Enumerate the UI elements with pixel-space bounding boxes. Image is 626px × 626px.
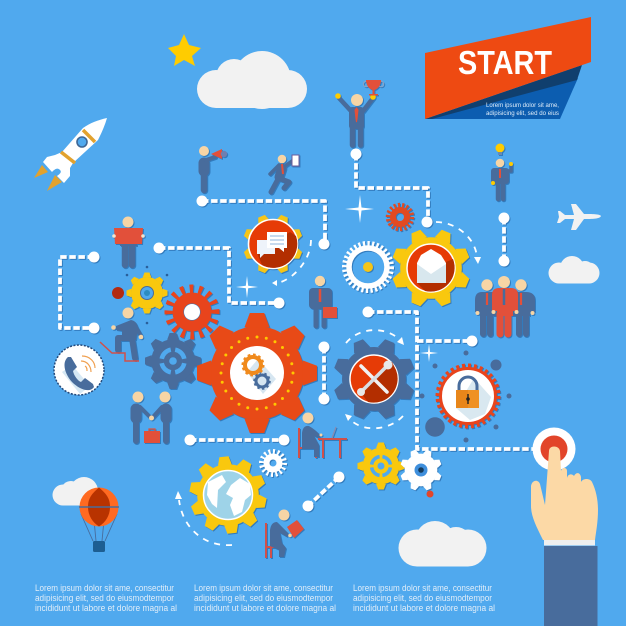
heading: start: START [458, 44, 552, 81]
decorative dots around padlock [420, 350, 512, 442]
gear: big red central [197, 313, 317, 433]
figure: man climbing stairs [111, 308, 143, 358]
icon: airplane [557, 204, 601, 230]
gear: yellow spoked [358, 442, 404, 490]
figure: man at desk [299, 412, 347, 458]
icon: small right cloud [548, 256, 600, 284]
text block: column 2 [194, 583, 336, 613]
sparkles [236, 195, 438, 362]
gear: small yellow [126, 272, 168, 314]
gear: globe [182, 449, 274, 541]
text block: column 1 [35, 583, 177, 613]
text block: column 3: incididunt ut labore et dolore magna al [353, 603, 495, 613]
text block: column 1: Lorem ipsum dolor sit ame, consectitur [35, 583, 174, 593]
gear: white ring gear [344, 244, 392, 290]
decorative red dot [426, 490, 434, 498]
gear: chat bubbles [234, 205, 312, 283]
icon: hand pressing button [531, 446, 598, 626]
arrows: dashed arcs [175, 222, 481, 545]
icon: rocket [34, 118, 107, 191]
figure: man reading book [112, 216, 145, 265]
text block: column 3 [353, 583, 495, 613]
icon: star [168, 34, 201, 66]
figures: handshake with briefcase [132, 392, 170, 443]
text block: column 2: incididunt ut labore et dolore magna al [194, 603, 336, 613]
figure: running man with clipboard [270, 155, 299, 192]
icon: bottom cloud [398, 521, 486, 566]
gear: dark blue spoked [145, 333, 201, 389]
gear: tools [320, 325, 428, 433]
arrow: red stairs [100, 342, 139, 361]
text block: column 3: Lorem ipsum dolor sit ame, consectitur [353, 583, 492, 593]
decorative dots near small yellow gear [112, 266, 168, 324]
gear: red sun [169, 289, 215, 335]
gear: small red [388, 206, 412, 228]
figure: man with megaphone [199, 146, 227, 190]
text block: column 2: Lorem ipsum dolor sit ame, consectitur [194, 583, 333, 593]
banner: start: Lorem ipsum dolor sit ame, [486, 102, 559, 109]
icon: hot air balloon [79, 488, 119, 552]
icon: phone badge [54, 345, 104, 395]
text block: column 3: adipisicing elit, sed do eiusmodtempor [353, 593, 492, 603]
text block: column 1: incididunt ut labore et dolore magna al [35, 603, 177, 613]
gear: white eye [394, 443, 448, 497]
gear: padlock [438, 366, 498, 426]
gear: small white sun [262, 452, 284, 474]
button: start press [532, 428, 576, 470]
text block: column 1: adipisicing elit, sed do eiusmodtempor [35, 593, 174, 603]
banner: start [425, 17, 591, 119]
figures: team of three [475, 276, 535, 334]
figure: man with trophy [335, 80, 384, 145]
figure: man with briefcase [309, 276, 337, 326]
figure: seated man reading [266, 510, 304, 558]
icon: left cloud [52, 477, 106, 506]
text block: column 2: adipisicing elit, sed do eiusmodtempor [194, 593, 333, 603]
gear: envelope [379, 216, 483, 320]
figure: man with idea bulb [491, 144, 513, 199]
dashed connector network [60, 148, 533, 512]
icon: large cloud [197, 51, 307, 109]
banner: start: adipisicing elit, sed do eius [486, 110, 560, 117]
